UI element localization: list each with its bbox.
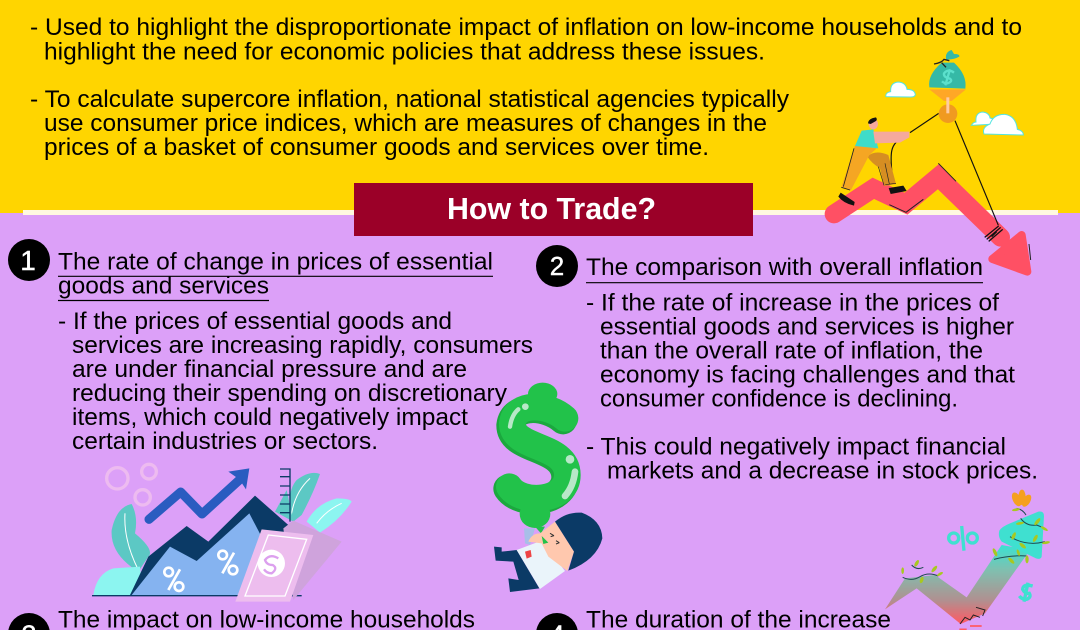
person — [838, 117, 909, 206]
heading: How to Trade? — [354, 183, 753, 236]
text block: rate of change details: services are increasing rapidly, consumers — [72, 332, 533, 359]
text block: rate of change details — [58, 308, 533, 455]
clouds — [886, 82, 1023, 135]
text block: use of supercore inflation: highlight the need for economic policies that address these issues. — [44, 38, 765, 65]
number badge 3 — [8, 613, 50, 630]
text block: how to calculate: prices of a basket of consumer goods and services over time. — [44, 134, 709, 161]
panel: purple background — [0, 213, 1080, 630]
heading: rate of change: The rate of change in prices of essential — [58, 248, 493, 276]
bubbles — [107, 464, 156, 505]
dollar balloon — [507, 383, 575, 533]
cracked tip — [960, 607, 985, 624]
text block: use of supercore inflation — [30, 14, 1022, 65]
ropes — [891, 113, 998, 225]
number badge 1: 1 — [20, 245, 36, 276]
text block: rate of change details: certain industries or sectors. — [72, 428, 378, 455]
text block: use of supercore inflation: - Used to highlight the disproportionate impact of inflation on low-income households and to — [30, 14, 1022, 41]
heading: rate of change: goods and services — [58, 272, 269, 300]
text block: how to calculate: use consumer price indices, which are measures of changes in the — [44, 110, 767, 137]
rising arrow — [149, 468, 249, 519]
number badge 2: 2 — [550, 251, 564, 281]
text block: comparison details: essential goods and services is higher — [600, 314, 1014, 340]
percent sign — [949, 526, 977, 551]
text block: rate of change details: - If the prices of essential goods and — [58, 308, 452, 335]
text block: comparison details: than the overall rate of inflation, the — [600, 338, 983, 364]
icon: rising chart with money — [92, 464, 352, 602]
text block: comparison details: - If the rate of increase in the prices of — [586, 290, 999, 316]
feathers — [112, 504, 150, 572]
banknotes — [283, 521, 342, 600]
heading: comparison with overall inflation: The comparison with overall inflation — [586, 254, 983, 281]
text block: comparison details — [586, 290, 1038, 484]
text block: comparison details: consumer confidence is declining. — [600, 386, 958, 412]
number badge 4 — [536, 613, 578, 630]
white divider band — [23, 210, 1058, 215]
heading: How to Trade?: How to Trade? — [447, 192, 656, 226]
number badge 1 — [8, 239, 50, 281]
panel: yellow top background — [0, 0, 1080, 213]
icon: person pulling falling arrow — [834, 50, 1031, 272]
text block: how to calculate: - To calculate supercore inflation, national statistical agencies typically — [30, 86, 790, 113]
man — [494, 513, 602, 592]
number badge 2 — [536, 245, 578, 287]
heading: rate of change — [58, 248, 493, 300]
text block: comparison details: - This could negatively impact financial — [586, 434, 1006, 460]
ruler — [275, 490, 293, 522]
text block: how to calculate — [30, 86, 790, 161]
text block: comparison details: markets and a decrease in stock prices. — [607, 458, 1038, 484]
gradient zigzag arrow — [885, 545, 1030, 624]
orange flower — [1010, 490, 1033, 508]
red falling arrow — [834, 163, 1031, 272]
icon: man inflating dollar balloon — [494, 383, 602, 592]
vines and leaves — [903, 508, 1047, 579]
text block: rate of change details: items, which could negatively impact — [72, 404, 468, 431]
text block: rate of change details: reducing their spending on discretionary — [72, 380, 508, 407]
text block: comparison details: economy is facing challenges and that — [600, 362, 1015, 388]
money bag and hourglass — [929, 63, 966, 89]
text block: rate of change details: are under financial pressure and are — [72, 356, 467, 383]
percent marks — [164, 551, 237, 591]
icon: growing arrow with vines — [885, 490, 1050, 629]
mountains — [130, 496, 293, 595]
dollar sign — [1019, 583, 1033, 602]
